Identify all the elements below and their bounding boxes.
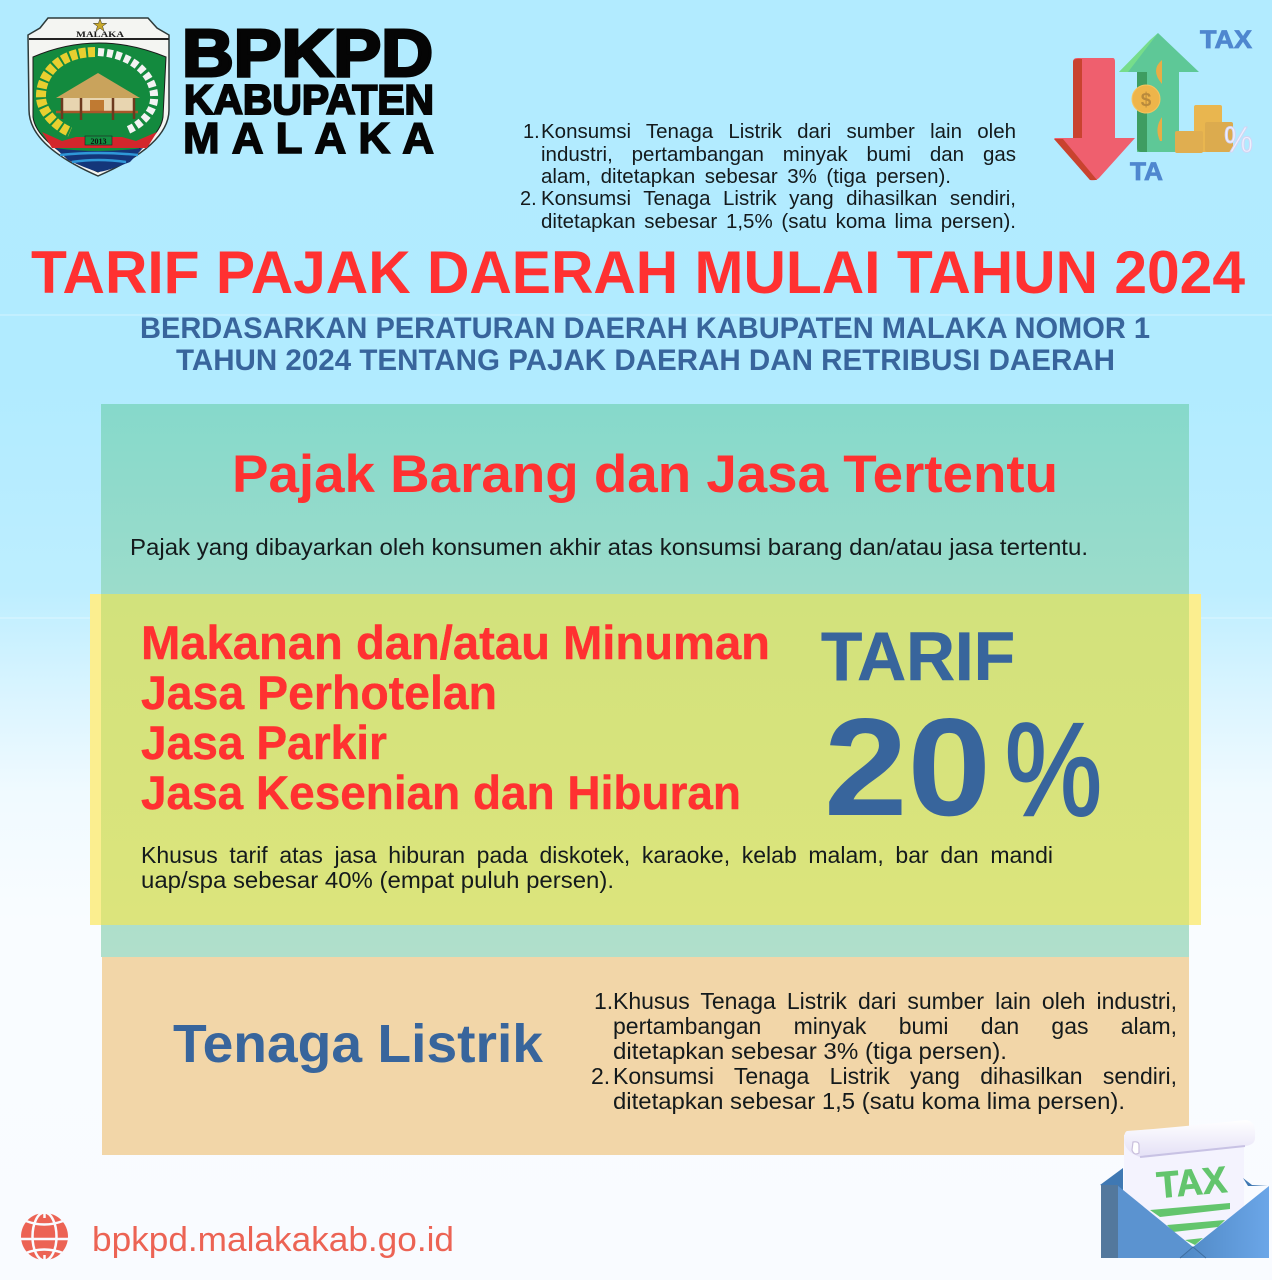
title: TARIF PAJAK DAERAH MULAI TAHUN 2024 [31,239,1246,306]
list numbers and unjustified lines [591,988,1125,1114]
website url: bpkpd.malakakab.go.id [92,1221,454,1259]
list numbers and unjustified lines: ditetapkan sebesar 1,5 (satu koma lima persen). [613,1088,1125,1114]
list of taxed services: Jasa Parkir [141,716,387,769]
list of taxed services: Jasa Perhotelan [141,666,497,719]
electricity rates list: Khusus Tenaga Listrik dari sumber lain oleh industri, [613,988,1177,1014]
logo: Kabupaten Malaka shield: MALAKA [76,29,125,39]
list of taxed services: Jasa Kesenian dan Hiburan [141,766,741,819]
list of taxed services [141,616,770,819]
icon: tax up and down arrows: TAX [1200,26,1252,54]
special rate note, second line: uap/spa sebesar 40% (empat puluh persen). [141,867,614,893]
list numbers: top note [520,121,540,210]
icon: tax up and down arrows: $ [1141,90,1152,111]
subtitle: BERDASARKAN PERATURAN DAERAH KABUPATEN MALAKA NOMOR 1 [140,312,1150,345]
electricity rates list: pertambangan minyak bumi dan gas alam, [613,1013,1177,1039]
icon: tax up and down arrows: TA [1130,158,1163,186]
logo: Kabupaten Malaka shield [28,18,169,176]
description: Pajak yang dibayarkan oleh konsumen akhir atas konsumsi barang dan/atau jasa tertentu. [130,534,1088,560]
list numbers and unjustified lines: 1. [594,988,613,1014]
logo wordmark: BPKPD Kabupaten Malaka: KABUPATEN [184,76,434,123]
tarif value: % [1005,696,1102,843]
logo wordmark: BPKPD Kabupaten Malaka: MALAKA [183,114,434,163]
top note: electricity rates [541,120,1016,233]
panel: Tenaga Listrik [102,957,1189,1155]
icon: tax letter in envelope [1100,1120,1269,1258]
panel: tarif 20 percent [90,594,1201,925]
special rate note, first line: Khusus tarif atas jasa hiburan pada diskotek, karaoke, kelab malam, bar dan mandi [141,842,1053,868]
tarif value [824,690,1102,845]
list of taxed services: Makanan dan/atau Minuman [141,616,770,669]
electricity rates list [613,988,1177,1089]
subtitle [140,312,1150,377]
logo: Kabupaten Malaka shield: 2013 [90,137,106,146]
heading: Tenaga Listrik: Tenaga Listrik [173,1014,544,1074]
list numbers: top note: 2. [520,188,537,210]
top note: electricity rates: Konsumsi Tenaga Listrik yang dihasilkan sendiri, [541,187,1016,210]
list numbers and unjustified lines: 2. [591,1063,610,1089]
electricity rates list: Konsumsi Tenaga Listrik yang dihasilkan sendiri, [613,1063,1177,1089]
icon: tax up and down arrows [1054,26,1253,186]
icon: tax up and down arrows: % [1224,119,1253,160]
top note: electricity rates: industri, pertambangan minyak bumi dan gas [541,143,1016,166]
top note: electricity rates: ditetapkan sebesar 1,5% (satu koma lima persen). [541,210,1016,233]
tarif label: TARIF [821,618,1015,695]
list numbers: top note: 1. [523,121,540,143]
list numbers and unjustified lines: ditetapkan sebesar 3% (tiga persen). [613,1038,1007,1064]
panel: Pajak Barang dan Jasa Tertentu [101,404,1189,957]
subtitle: TAHUN 2024 TENTANG PAJAK DAERAH DAN RETRIBUSI DAERAH [176,344,1115,377]
icon: globe [20,1212,69,1261]
tarif value: 20 [824,690,991,845]
top note: electricity rates: Konsumsi Tenaga Listrik dari sumber lain oleh [541,120,1016,143]
logo wordmark: BPKPD Kabupaten Malaka: BPKPD [182,16,433,91]
icon: tax letter in envelope: TAX [1155,1159,1229,1206]
top note: electricity rates: alam, ditetapkan sebesar 3% (tiga persen). [541,165,951,188]
heading: Pajak Barang dan Jasa Tertentu: Pajak Barang dan Jasa Tertentu [232,445,1058,504]
logo wordmark: BPKPD Kabupaten Malaka [182,16,434,163]
